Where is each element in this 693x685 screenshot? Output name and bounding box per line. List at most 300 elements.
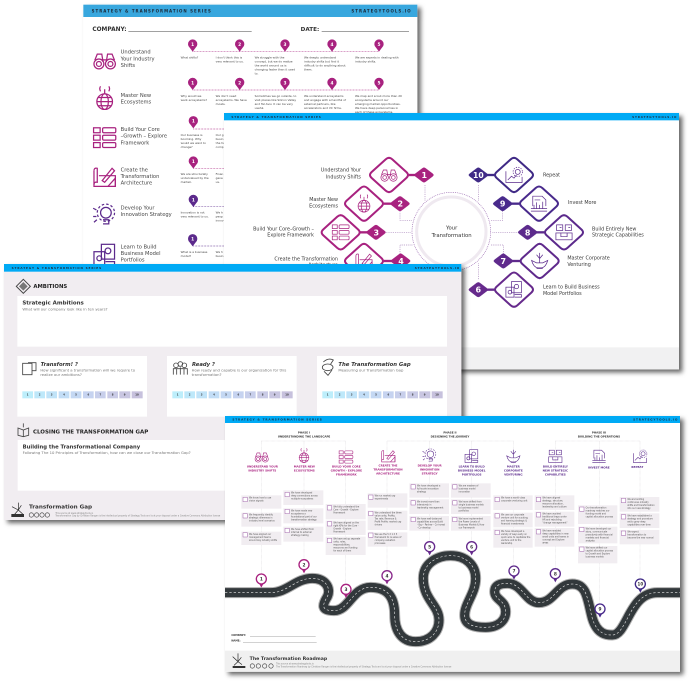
label 3: Explore Framework — [267, 233, 314, 239]
ambitions heading — [16, 279, 67, 293]
row: master new ecosystems: 2 — [238, 80, 241, 86]
column 8: build entirely new strategic capabilities: We have aligned — [542, 497, 561, 500]
panel: the transformation gap: 10 — [435, 393, 439, 397]
column 2: master new ecosystems: We have shifted from — [291, 528, 314, 531]
node 4: 4 — [398, 257, 404, 266]
column 8: build entirely new strategic capabilities: small units and teams in — [542, 535, 569, 538]
column 9: invest more: We have shifted our — [586, 547, 607, 550]
column 9: invest more: capital allocation process — [586, 516, 614, 519]
column 4: create the transformation architecture: drivers — [375, 523, 383, 526]
row: master new ecosystems: moats. — [216, 102, 226, 106]
column 10: repeat: We expect — [627, 531, 639, 534]
row: business model portfolios: Business Model — [121, 251, 161, 257]
panel: transform: 2 — [39, 393, 41, 397]
row: master new ecosystems: We don't need — [216, 94, 237, 98]
header bar — [4, 264, 461, 272]
column 7: master corporate venturing: MASTER — [507, 464, 521, 468]
label 2: Master New — [309, 197, 338, 203]
column 2: master new ecosystems: foundational part of our — [291, 515, 317, 518]
row: master new ecosystems: accelerators and VC firms. — [304, 106, 342, 110]
label 1: Understand Your — [321, 168, 361, 174]
row: understand your industry shifts: 5 — [377, 42, 381, 48]
column 5: develop your innovation strategy: We invest more than — [417, 501, 440, 504]
column 10: repeat: strategy and procedure — [627, 517, 653, 520]
column 7: master corporate venturing: venture unit to the — [501, 539, 522, 542]
column 1: understand your industry shifts: strategic dilemmas in — [249, 516, 273, 519]
panel: ready: Ready ? — [192, 362, 215, 368]
pin 4 — [382, 571, 392, 584]
pin 7: 7 — [512, 569, 516, 575]
header series title: STRATEGY & TRANSFORMATION SERIES — [92, 8, 212, 13]
row: transformation architecture: gene — [216, 176, 223, 180]
row: transformation architecture: undervalued by the — [181, 176, 209, 180]
column 6: learn to build business model portfolios: to business model — [459, 507, 479, 510]
node 1 — [370, 158, 433, 192]
column 3: build your core growth explore framework: We fully understand the — [333, 505, 360, 508]
header site name: STRATEGYTOOLS.IO — [632, 115, 677, 119]
column 4: create the transformation architecture: ARCHITECTURE — [376, 472, 400, 476]
row: core growth explore framework: Our business is — [181, 133, 203, 137]
column 5: develop your innovation strategy: leadership management — [417, 507, 444, 510]
column 9: invest more: proactively with financial — [586, 533, 613, 536]
sheet: the transformation roadmap — [225, 416, 680, 672]
closing the gap heading — [18, 423, 148, 437]
column 8: build entirely new strategic capabilities: BUILD ENTIRELY — [543, 464, 569, 468]
column 3: build your core growth explore framework: Framework — [333, 511, 346, 514]
column 9: invest more: story, communicate — [586, 530, 608, 533]
company and name fields — [231, 633, 317, 643]
panel: ready: 7 — [249, 393, 251, 397]
pin 6 — [467, 542, 477, 555]
panel: the transformation gap: 8 — [412, 393, 414, 397]
column 7: master corporate venturing: financial investments — [501, 522, 525, 525]
row: master new ecosystems — [97, 78, 402, 114]
panel: the transformation gap: 2 — [339, 393, 341, 397]
column 5: develop your innovation strategy: We have developed a — [417, 485, 441, 488]
panel: transform: 7 — [99, 393, 101, 397]
node 7: 7 — [501, 257, 506, 266]
footer: transformation gap — [11, 503, 221, 517]
column 2: master new ecosystems: ecosystems a — [291, 512, 306, 515]
row: transformation architecture: market. — [181, 180, 192, 184]
row: master new ecosystems: We have deep personal ties in — [355, 106, 398, 110]
column 9: invest more: We have developed our — [586, 527, 611, 530]
row: business model portfolios: Portfolios — [121, 258, 145, 264]
column 9: invest more: Our transformation — [586, 507, 607, 510]
column 7: master corporate venturing: We use our corporate — [501, 513, 525, 516]
column 9: invest more: roadmap matches our — [586, 510, 610, 513]
column 10: repeat: continuous industry — [627, 501, 649, 504]
panel: the transformation gap: 3 — [351, 393, 353, 397]
panel: ready: 4 — [213, 393, 215, 397]
header bar — [224, 113, 679, 120]
row: business model portfolios: busin — [216, 254, 224, 258]
panel: strategic ambitions: What will our company look like in ten years? — [22, 307, 108, 311]
column 5: develop your innovation strategy: full-scale innovation — [417, 488, 439, 491]
column 9: invest more: markets and financial — [586, 536, 609, 539]
panel: transform: 10 — [135, 393, 139, 397]
row: master new ecosystems: and engage with a handful of — [304, 98, 347, 102]
row: understand your industry shifts: 1 — [191, 42, 194, 48]
column 8: build entirely new strategic capabilities: HR and rebuilding — [542, 519, 562, 522]
column 7: master corporate venturing: VENTURING — [504, 472, 523, 476]
column 3: build your core growth explore framework: We have aligned on the — [333, 521, 360, 524]
label 1: Industry Shifts — [326, 174, 361, 180]
column 2: master new ecosystems: multiple ecosystems — [291, 497, 314, 500]
column 5: develop your innovation strategy: - Co-develop — [417, 526, 431, 529]
row: understand your industry shifts — [94, 39, 399, 75]
row: understand your industry shifts: industry shifts. — [355, 59, 376, 63]
row: business model portfolios: model? — [181, 254, 192, 258]
column 6: learn to build business model portfolios: BUSINESS MODEL — [458, 468, 486, 472]
column 3: build your core growth explore framework: BUILD YOUR CORE — [332, 464, 361, 468]
panel: ready: 3 — [201, 393, 203, 397]
column 9: invest more: INVEST MORE — [588, 465, 610, 469]
column 6: learn to build business model portfolios: business model — [459, 488, 476, 491]
panel: strategic ambitions — [17, 296, 447, 347]
column 5: develop your innovation strategy: We have well-balanced — [417, 517, 443, 520]
label 4: Architecture — [308, 263, 338, 269]
pin 1 — [256, 574, 266, 588]
node 9: 9 — [500, 200, 506, 209]
ambitions heading: AMBITIONS — [33, 284, 67, 290]
row: understand your industry shifts: very relevant to us. — [216, 59, 244, 63]
column 5: develop your innovation strategy: - Buy - Partner - Co-invest — [417, 523, 445, 526]
column 2: master new ecosystems: We have made new — [291, 509, 312, 512]
row: understand your industry shifts: to. — [255, 71, 258, 75]
row: master new ecosystems: each of these ecosystems. — [355, 110, 393, 114]
row: innovation strategy: Innovation Strategy — [121, 212, 172, 218]
label 6: Learn to Build Business — [543, 285, 600, 291]
row: core growth explore framework: booming. Why — [181, 137, 202, 141]
row: core growth explore framework: busin — [216, 137, 224, 141]
node 8: 8 — [525, 228, 531, 237]
column 6: learn to build business model portfolios: portfolios — [459, 510, 470, 513]
panel: transform: How significant a transformation will we require to — [40, 368, 136, 372]
pin 2 — [299, 560, 309, 573]
row: transformation architecture — [94, 156, 224, 187]
column 8: build entirely new strategic capabilities: We have avoided — [542, 513, 562, 516]
panel: ready: 6 — [237, 393, 239, 397]
label 8: Strategic Capabilities — [592, 233, 644, 239]
column 10: repeat: into our new strategy — [627, 507, 651, 510]
column 9: invest more: business models — [586, 556, 604, 559]
panel: transform: 9 — [124, 393, 126, 397]
column 2: master new ecosystems: transformation strategy — [291, 518, 317, 521]
column 5: develop your innovation strategy: STRATEGY — [422, 472, 439, 476]
row: understand your industry shifts: concept, but we do realize — [255, 59, 293, 63]
footer: transformation gap: Transformation Gap — [29, 505, 92, 511]
column 4: create the transformation architecture — [368, 451, 407, 547]
header series title: STRATEGY & TRANSFORMATION SERIES — [12, 266, 102, 270]
column 8: build entirely new strategic capabilities: concept and Explore — [542, 538, 565, 541]
column 10: repeat: We have established a — [627, 514, 652, 517]
row: master new ecosystems: 3 — [283, 80, 287, 86]
column 3: build your core growth explore framework: right KPIs for the Core - — [333, 524, 359, 527]
row: master new ecosystems: Ecosystems — [121, 100, 152, 106]
label 8: Build Entirely New — [592, 226, 636, 232]
company and name fields: COMPANY: — [231, 633, 246, 637]
row: master new ecosystems: want ecosystems? — [181, 98, 208, 102]
pin 7 — [509, 566, 519, 580]
sheet: self assessment worksheet — [83, 5, 417, 281]
row: business model portfolios: Learn to Build — [121, 244, 156, 250]
column 7: master corporate venturing: We have developed a — [501, 530, 525, 533]
row: transformation architecture: We are structurally — [181, 172, 208, 176]
row: core growth explore framework: –Growth – Explore — [121, 134, 167, 140]
pin 5: 5 — [428, 544, 431, 550]
center circle: your transformation: Your — [445, 226, 458, 232]
pin 8 — [550, 569, 560, 582]
column 4: create the transformation architecture: TRANSFORMATION — [373, 468, 403, 472]
row: master new ecosystems: useful. — [255, 106, 264, 110]
panel: ready: 9 — [274, 393, 276, 397]
row: master new ecosystems: visit places like Silicon Valley — [255, 98, 296, 102]
column 8: build entirely new strategic capabilities: We have enabled — [542, 529, 562, 532]
column 2: master new ecosystems: deep connections across — [291, 494, 319, 497]
column 3: build your core growth explore framework: units, roles, — [333, 540, 346, 543]
column 7: master corporate venturing — [493, 450, 533, 548]
row: understand your industry shifts: Understand — [121, 50, 151, 56]
pin 10: 10 — [638, 582, 643, 587]
dotted timeline guides — [261, 441, 640, 609]
column 4: create the transformation architecture: CREATE THE — [379, 464, 398, 468]
node 7 — [494, 244, 559, 278]
footer: transformation gap: This source at www.strategytools.io — [55, 512, 94, 515]
panel: the transformation gap: 1 — [327, 393, 329, 397]
row: business model portfolios: We h — [216, 250, 223, 254]
row: master new ecosystems: ecosystems around our — [355, 98, 389, 102]
column 9: invest more: capital allocation process — [586, 550, 614, 553]
row: core growth explore framework: 1 — [192, 119, 195, 125]
row: master new ecosystems: and Tel Aviv. It can be very — [255, 102, 293, 106]
column 6: learn to build business model portfolios: LEARN TO BUILD — [459, 464, 485, 468]
sheet: transformation gap — [4, 264, 461, 520]
panel: the transformation gap: 6 — [387, 393, 389, 397]
row: innovation strategy: Develop Your — [121, 205, 155, 211]
center circle: your transformation: Transformation — [431, 233, 472, 239]
column 8: build entirely new strategic capabilities: CAPABILITIES — [545, 472, 566, 476]
column 7: master corporate venturing: venture unit for scouting — [501, 516, 528, 519]
column 3: build your core growth explore framework — [326, 451, 366, 555]
panel: building the transformational company — [18, 440, 447, 491]
row: business model portfolios: 1 — [191, 237, 194, 243]
node 8 — [518, 215, 583, 249]
pin 10 — [635, 579, 645, 593]
pin 2: 2 — [302, 562, 306, 568]
panel: ready: How ready and capable is our organization for this — [192, 368, 286, 372]
column 4: create the transformation architecture: value units, Profits, — [375, 514, 396, 517]
header bar — [225, 416, 680, 423]
column 3: build your core growth explore framework: GROWTH - EXPLORE — [331, 468, 362, 472]
date field: DATE: — [301, 27, 319, 33]
column 3: build your core growth explore framework: FRAMEWORK — [336, 472, 357, 476]
column 8: build entirely new strategic capabilities: deep capabilities in new — [542, 532, 569, 535]
row: core growth explore framework: the fu — [216, 141, 224, 145]
row: transformation architecture: Architecture — [121, 181, 152, 187]
panel: ready — [167, 356, 297, 417]
column 1: understand your industry shifts: We know how to use — [249, 497, 272, 500]
row: core growth explore framework: change? — [181, 145, 193, 149]
row: master new ecosystems: 4 — [330, 80, 334, 86]
column 2: master new ecosystems: MASTER NEW — [294, 464, 315, 468]
row: understand your industry shifts: the world around us is — [255, 63, 287, 67]
footer title: The Transformation Roadmap — [250, 656, 328, 662]
column 1: understand your industry shifts: We have aligned our — [249, 533, 271, 536]
row: innovation strategy: very relevant to us. — [181, 215, 209, 219]
row: understand your industry shifts: them. — [304, 67, 312, 71]
label 9: Invest More — [568, 200, 596, 206]
row: understand your industry shifts: changing faster than it used — [255, 67, 295, 71]
column 5: develop your innovation strategy: capabilities across Build — [417, 520, 444, 523]
panel: the transformation gap: 7 — [399, 393, 401, 397]
column 2: master new ecosystems — [283, 448, 323, 542]
pin 4: 4 — [385, 573, 389, 579]
panel: transform: 6 — [87, 393, 89, 397]
phase I heading: PHASE I — [298, 431, 310, 435]
column 8: build entirely new strategic capabilities: strategy, structure, — [542, 500, 563, 503]
pin 6: 6 — [470, 544, 473, 550]
footer licence: This source at www.strategytools.io — [276, 663, 315, 666]
center circle: your transformation — [412, 192, 491, 271]
phase I heading: UNDERSTANDING THE LANDSCAPE — [278, 434, 330, 438]
pin 3: 3 — [344, 587, 348, 593]
column 8: build entirely new strategic capabilities: NEW STRATEGIC — [543, 468, 568, 472]
header series title: STRATEGY & TRANSFORMATION SERIES — [231, 115, 322, 119]
panel: transform: Transform! ? — [41, 362, 78, 368]
column 9: invest more: to Growth and Explore — [586, 553, 611, 556]
node 3: 3 — [374, 228, 379, 237]
column 7: master corporate venturing: and learning strategic & — [501, 519, 527, 522]
column 5: develop your innovation strategy — [409, 449, 449, 531]
column 9: invest more — [578, 450, 617, 563]
panel: the transformation gap: 4 — [363, 393, 365, 397]
phase III heading: PHASE III — [592, 431, 606, 435]
column 5: develop your innovation strategy: INNOVATION — [420, 468, 440, 472]
column 8: build entirely new strategic capabilities: resource allocation, — [542, 503, 564, 506]
row: master new ecosystems: Master New — [121, 93, 151, 99]
column 6: learn to build business model portfolios: innovation — [459, 491, 471, 494]
pin 1: 1 — [260, 577, 263, 583]
node 6 — [469, 272, 533, 307]
column 8: build entirely new strategic capabilities — [535, 450, 574, 547]
column 2: master new ecosystems: We have developed — [291, 491, 313, 494]
column 2: master new ecosystems: strategy making — [291, 534, 309, 537]
node 4 — [345, 244, 410, 278]
panel: building the transformational company: Building the Transformational Company — [23, 444, 141, 450]
column 4: create the transformation architecture: experiments — [375, 498, 389, 501]
panel: the transformation gap: 9 — [424, 393, 426, 397]
column 1: understand your industry shifts: vision signals — [249, 500, 264, 503]
column 5: develop your innovation strategy: DEVELOP YOUR — [418, 464, 443, 468]
node 2: 2 — [398, 200, 403, 209]
panel: transform: 4 — [63, 393, 65, 397]
phase III heading: BUILDING THE OPERATIONS — [578, 434, 620, 438]
column 9: invest more: analysts — [586, 539, 596, 542]
row: business model portfolios: What is a business — [181, 250, 208, 254]
column 4: create the transformation architecture: Profit Profile; market cap — [375, 520, 402, 523]
row: master new ecosystems: 1 — [191, 80, 194, 86]
row: understand your industry shifts: Shifts — [121, 63, 135, 69]
column 4: create the transformation architecture: processes — [375, 542, 386, 545]
footer licence — [250, 663, 452, 669]
column 6: learn to build business model portfolios: single business models — [459, 504, 485, 507]
column 1: understand your industry shifts: UNDERSTAND YOUR — [247, 464, 279, 468]
panel: the transformation gap: 5 — [375, 393, 377, 397]
closing the gap heading: CLOSING THE TRANSFORMATION GAP — [33, 430, 148, 436]
column 7: master corporate venturing: quick wins to capitalize the — [501, 536, 531, 539]
label 4: Create the Transformation — [274, 256, 338, 262]
node 9 — [493, 186, 558, 221]
pin 8: 8 — [554, 571, 557, 577]
column 6: learn to build business model portfolios — [451, 450, 491, 531]
company and name fields: NAME: — [231, 639, 241, 643]
column 8: build entirely new strategic capabilities: areas — [542, 541, 549, 544]
panel: transform: 5 — [75, 393, 77, 397]
row: transformation architecture: Finan — [216, 172, 223, 176]
column 4: create the transformation architecture: We run market cap — [375, 495, 396, 498]
header site name: STRATEGYTOOLS.IO — [415, 266, 460, 270]
column 10: repeat: transformation to — [627, 534, 647, 537]
column 3: build your core growth explore framework: resources and funding — [333, 546, 358, 549]
node 10: 10 — [473, 171, 484, 180]
row: master new ecosystems: We understand ecosystems — [304, 94, 344, 98]
panel: transform: 8 — [112, 393, 114, 397]
column 10: repeat: shifts and transformation — [627, 504, 655, 507]
column 4: create the transformation architecture: company valuation — [375, 539, 396, 542]
row: understand your industry shifts: Your Industry — [120, 56, 155, 62]
label 2: Ecosystems — [309, 203, 338, 209]
footer logo — [233, 653, 245, 668]
pin 3 — [341, 584, 351, 598]
node 6: 6 — [476, 286, 482, 295]
pin 5 — [425, 542, 435, 555]
panel: ready: 10 — [285, 393, 289, 397]
footer licence: The Transformation Roadmap by Christian Rangen is the intellectual property of Strategy Tools and is at your disposal under a Creative Commons Attribution license — [276, 666, 452, 669]
dotted connectors — [384, 185, 519, 280]
panel: the transformation gap: The Transformation Gap — [338, 362, 411, 368]
row: understand your industry shifts: We are experts in dealing with — [355, 55, 399, 59]
panel: ready: 5 — [225, 393, 227, 397]
row: core growth explore framework: would we want to — [181, 141, 206, 145]
header series title: STRATEGY & TRANSFORMATION SERIES — [232, 418, 323, 422]
row: core growth explore framework: comp — [216, 145, 224, 149]
label 6: Model Portfolios — [543, 291, 582, 297]
column 1: understand your industry shifts: management teams — [249, 536, 272, 539]
column 6: learn to build business model portfolios: We are masters of — [459, 485, 479, 488]
column 7: master corporate venturing: corporate venturing unit — [501, 500, 528, 503]
column 3: build your core growth explore framework: responsibilities, — [333, 543, 350, 546]
header site name: STRATEGYTOOLS.IO — [633, 418, 678, 422]
row: understand your industry shifts: We deeply understand — [304, 55, 336, 59]
row: understand your industry shifts: 4 — [330, 42, 334, 48]
row: core growth explore framework: Framework — [121, 140, 149, 146]
row: core growth explore framework — [94, 116, 224, 149]
row: transformation architecture: Create the — [121, 167, 148, 173]
node 2 — [345, 186, 409, 221]
row: master new ecosystems: emerging market opportunities. — [355, 102, 401, 106]
row: innovation strategy — [93, 195, 224, 224]
column 5: develop your innovation strategy: strategy — [417, 491, 427, 494]
row: transformation architecture: us. — [216, 180, 220, 184]
column 1: understand your industry shifts: INDUSTRY SHIFTS — [248, 468, 276, 472]
sheet: your transformation diagram — [224, 113, 679, 369]
node 10 — [469, 158, 533, 192]
row: master new ecosystems: external partners, like — [304, 102, 336, 106]
column 8: build entirely new strategic capabilities: traditional traps under — [542, 516, 567, 519]
footer band — [225, 651, 680, 672]
column 10: repeat: become the new normal — [627, 537, 654, 540]
